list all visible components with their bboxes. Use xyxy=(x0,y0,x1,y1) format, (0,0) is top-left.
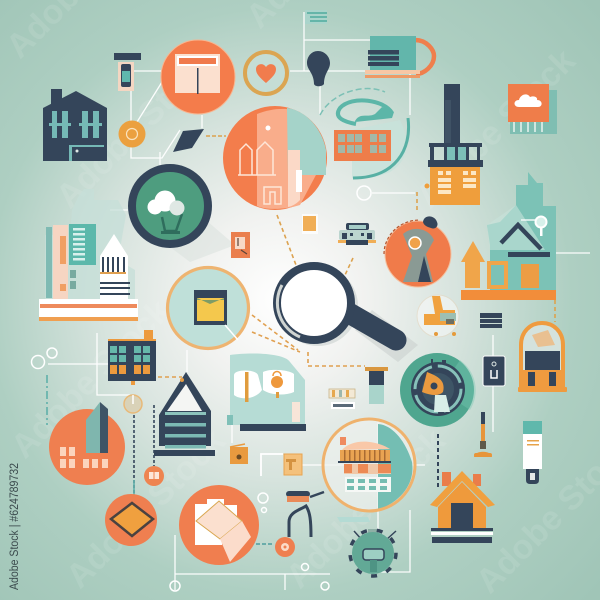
icon: heart ring xyxy=(245,52,287,94)
watermarks: Adobe Stock xyxy=(279,422,453,596)
icon: green magnifier cloud xyxy=(132,168,235,262)
icon: small orange node xyxy=(144,466,164,486)
icon: test tube xyxy=(523,421,542,484)
icon: bulb pin xyxy=(307,51,330,86)
stock id: Adobe Stock | #624789732 xyxy=(9,463,21,590)
icon: left building complex xyxy=(39,189,138,321)
icon: green dial xyxy=(400,353,476,427)
icon: green gear robot xyxy=(350,529,396,576)
icon: ring with house xyxy=(323,419,415,522)
icon: arch device xyxy=(286,491,324,537)
icon: orange circle with panel xyxy=(161,40,235,114)
watermarks: Adobe Stock xyxy=(49,42,223,216)
icon: small tiny box xyxy=(230,444,248,464)
icon: pen xyxy=(474,412,492,457)
icon: teal ring with building xyxy=(320,89,409,179)
icon: teal handled box xyxy=(365,36,434,78)
watermarks: Adobe Stock xyxy=(409,42,583,216)
icon: orange house xyxy=(430,471,495,543)
icon: keyhole circle xyxy=(384,216,451,287)
icon: tower xyxy=(424,84,483,205)
main magnifier xyxy=(277,266,418,362)
icon: dark slats xyxy=(480,313,502,328)
icon: small gold node xyxy=(124,395,142,413)
icon: orange jukebox xyxy=(518,323,567,392)
icon: dark house xyxy=(43,89,107,161)
icon: large orange circle xyxy=(223,106,327,210)
icon: small car xyxy=(338,223,376,245)
icon: right building with house xyxy=(461,172,556,300)
panel: centre teal panel xyxy=(227,353,306,431)
icon: small device xyxy=(329,389,355,409)
icon: outline key plate xyxy=(261,454,302,476)
icon: flag xyxy=(305,10,327,24)
icon: orange circle diamond xyxy=(105,494,157,546)
icon: cloud card xyxy=(508,84,557,134)
icon: gold node xyxy=(118,120,146,148)
watermarks: Adobe Stock xyxy=(4,292,178,466)
icon: small orange square xyxy=(302,214,318,234)
icon: orange circle with open box xyxy=(179,485,259,565)
watermarks: Adobe Stock xyxy=(59,422,233,596)
icon: dark kite xyxy=(173,129,204,152)
icon: dark office block xyxy=(108,330,156,385)
dashed connectors xyxy=(47,136,555,544)
icon: triangle house xyxy=(154,372,215,456)
connector nodes xyxy=(32,186,371,591)
icon: lock machine xyxy=(417,295,459,337)
icon: orange circle with teal tower xyxy=(49,402,125,485)
icon: switch xyxy=(483,356,505,386)
icon: ring with square xyxy=(168,268,248,348)
icon: small card xyxy=(231,232,250,258)
icon: tube fixture top xyxy=(114,53,141,91)
icon: cup fixture xyxy=(365,367,388,404)
icon: small orange target xyxy=(275,537,295,557)
